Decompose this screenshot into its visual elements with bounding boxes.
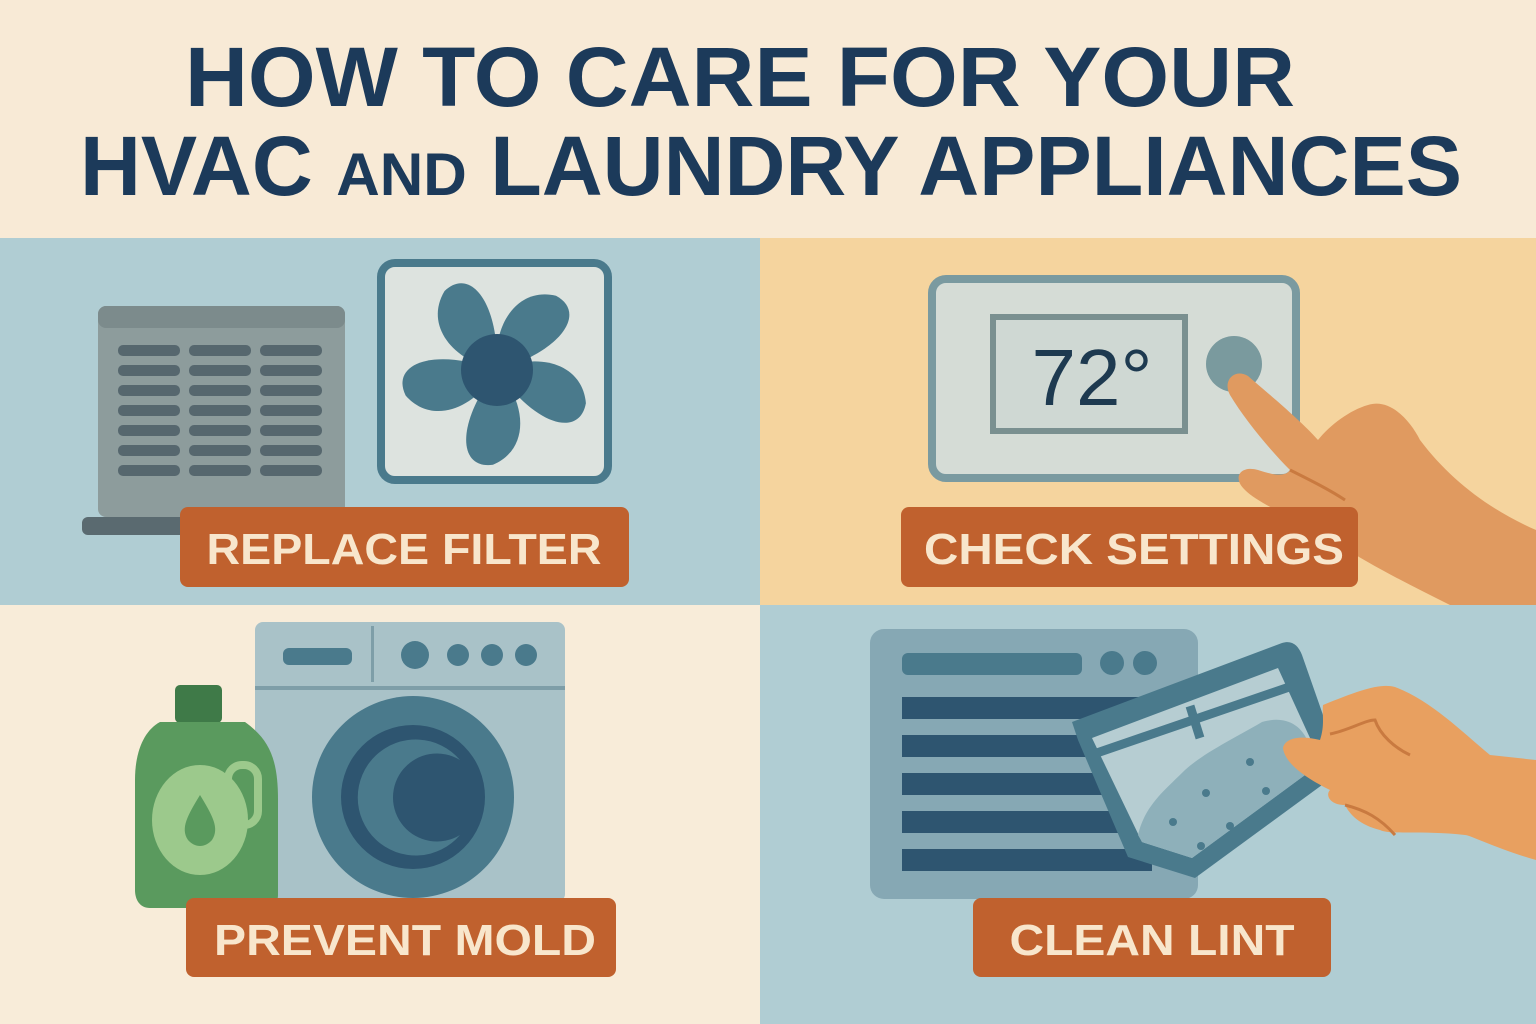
panel: prevent mold: [0, 605, 760, 1024]
label: check settings: [901, 507, 1358, 587]
icon: thermostat: 72°: [1032, 333, 1152, 422]
icon: hand pressing: [1228, 373, 1536, 605]
panel: clean lint: [760, 605, 1536, 1024]
label: clean lint: [973, 898, 1331, 977]
icon: air filter unit: [82, 306, 345, 535]
label: prevent mold: [186, 898, 616, 977]
title: HVAC AND LAUNDRY APPLIANCES: [80, 119, 1462, 213]
icon: hand holding: [1283, 686, 1536, 860]
icon: fan: [374, 253, 623, 501]
panel: check settings: [760, 238, 1536, 605]
label: replace filter: [180, 507, 629, 587]
panel: replace filter: [0, 238, 760, 605]
label: replace filter: REPLACE FILTER: [206, 525, 602, 574]
icon: lint screen: [1072, 642, 1330, 878]
label: clean lint: CLEAN LINT: [1010, 916, 1295, 965]
icon: dryer vent: [870, 629, 1198, 899]
title: [0, 0, 1536, 238]
icon: detergent bottle: [135, 685, 278, 908]
label: prevent mold: PREVENT MOLD: [214, 916, 596, 965]
icon: thermostat: [932, 279, 1296, 478]
icon: washing machine: [255, 622, 565, 902]
title: HOW TO CARE FOR YOUR: [185, 30, 1295, 124]
label: check settings: CHECK SETTINGS: [924, 525, 1344, 574]
